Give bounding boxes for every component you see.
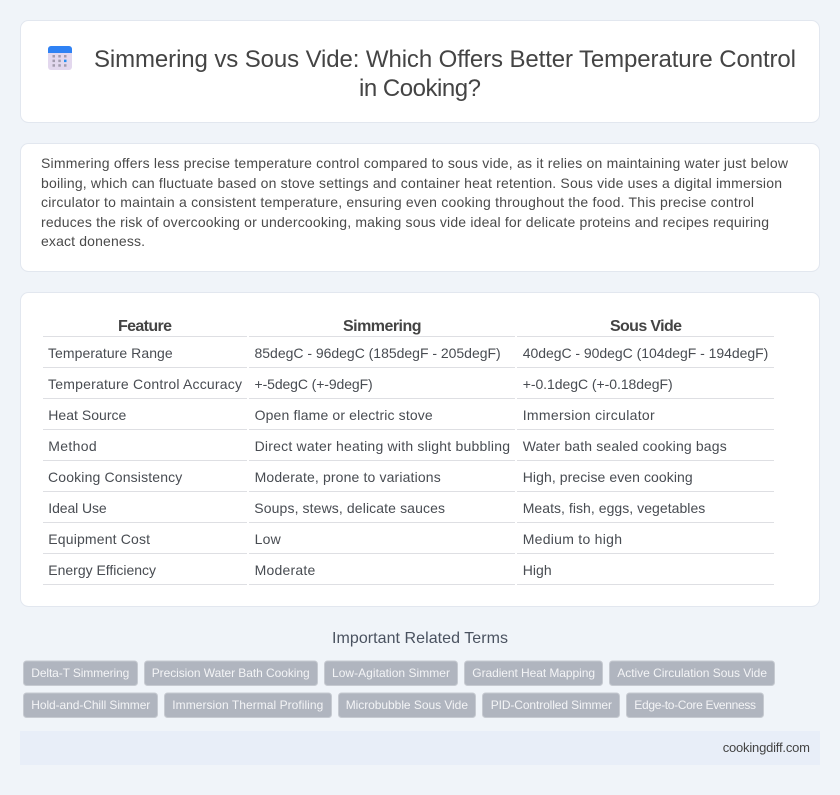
footer bar [20, 731, 820, 765]
row: energy efficiency [43, 562, 774, 585]
row: temperature control accuracy [43, 376, 774, 399]
tag: Low-Agitation Simmer: Low-Agitation Simmer [332, 666, 450, 680]
row: ideal use: Meats, fish, eggs, vegetables [523, 500, 705, 516]
summary paragraph: Simmering offers less precise temperature control compared to sous vide, as it relies on maintaining water just below [41, 155, 789, 171]
tag: Edge-to-Core Evenness: Edge-to-Core Evenness [634, 698, 756, 712]
row: ideal use: Ideal Use [48, 500, 107, 516]
tag: Hold-and-Chill Simmer: Hold-and-Chill Simmer [31, 698, 150, 712]
row: cooking consistency: Cooking Consistency [48, 469, 182, 485]
row: method [43, 438, 774, 461]
row: temperature range: 40degC - 90degC (104degF - 194degF) [523, 345, 768, 361]
panel: comparison table [20, 292, 820, 606]
tag: PID-Controlled Simmer [482, 693, 620, 718]
summary paragraph: boiling, which can fluctuate based on stove settings and container heat retention. Sous vide uses a digital immersion [41, 175, 782, 191]
row: temperature control accuracy: +-0.1degC (+-0.18degF) [523, 376, 673, 392]
tag: Hold-and-Chill Simmer [24, 693, 158, 718]
row: energy efficiency: Moderate [255, 562, 316, 578]
tag: PID-Controlled Simmer: PID-Controlled Simmer [491, 698, 612, 712]
tag: Immersion Thermal Profiling: Immersion Thermal Profiling [172, 698, 323, 712]
row: method: Method [48, 438, 97, 454]
tag: Delta-T Simmering: Delta-T Simmering [31, 666, 129, 680]
footer source text: cookingdiff.com [723, 740, 810, 755]
row: cooking consistency: Moderate, prone to variations [255, 469, 441, 485]
tag: Precision Water Bath Cooking: Precision Water Bath Cooking [152, 666, 310, 680]
summary paragraph: reduces the risk of overcooking or undercooking, making sous vide ideal for delicate proteins and recipes requiring [41, 214, 769, 230]
row: equipment cost [43, 531, 774, 554]
row: energy efficiency: Energy Efficiency [48, 562, 156, 578]
title: in Cooking? [359, 75, 481, 102]
row: ideal use [43, 500, 774, 523]
title [94, 46, 796, 102]
related terms tags [24, 661, 774, 718]
row: temperature range [43, 345, 774, 368]
tag: Delta-T Simmering [24, 661, 138, 686]
row: equipment cost: Medium to high [523, 531, 622, 547]
row: cooking consistency [43, 469, 774, 492]
summary paragraph: circulator to maintain a consistent temperature, ensuring even cooking throughout the food. This precise control [41, 194, 754, 210]
row: ideal use: Soups, stews, delicate sauces [254, 500, 445, 516]
summary paragraph: exact doneness. [41, 233, 145, 249]
panel: summary card [20, 144, 820, 272]
tag: Gradient Heat Mapping [464, 661, 602, 686]
row: temperature control accuracy: +-5degC (+-9degF) [254, 376, 373, 392]
tag: Microbubble Sous Vide: Microbubble Sous Vide [346, 698, 468, 712]
tag: Low-Agitation Simmer [324, 661, 458, 686]
tag: Active Circulation Sous Vide: Active Circulation Sous Vide [617, 666, 767, 680]
heading: important related terms: Important Related Terms [332, 630, 508, 647]
row: temperature control accuracy: Temperature Control Accuracy [48, 376, 242, 392]
row: heat source: Immersion circulator [523, 407, 655, 423]
row: heat source: Open flame or electric stove [255, 407, 433, 423]
tag: Edge-to-Core Evenness [626, 693, 764, 718]
panel: title card [20, 20, 820, 122]
tag: Microbubble Sous Vide [338, 693, 476, 718]
table header row [43, 318, 774, 337]
row: method: Direct water heating with slight bubbling [255, 438, 510, 454]
table header row: Feature [118, 318, 172, 335]
tag: Immersion Thermal Profiling [164, 693, 332, 718]
row: temperature range: 85degC - 96degC (185degF - 205degF) [254, 345, 501, 361]
tag: Gradient Heat Mapping: Gradient Heat Mapping [472, 666, 595, 680]
table header row: Simmering [343, 318, 422, 335]
table header row: Sous Vide [610, 318, 682, 335]
row: temperature range: Temperature Range [48, 345, 173, 361]
row: equipment cost: Low [255, 531, 282, 547]
row: method: Water bath sealed cooking bags [523, 438, 727, 454]
row: heat source: Heat Source [48, 407, 127, 423]
title: Simmering vs Sous Vide: Which Offers Better Temperature Control [94, 46, 796, 73]
row: cooking consistency: High, precise even cooking [523, 469, 693, 485]
tag: Active Circulation Sous Vide [610, 661, 774, 686]
icon: calendar [48, 46, 72, 70]
row: energy efficiency: High [523, 562, 552, 578]
row: equipment cost: Equipment Cost [48, 531, 150, 547]
tag: Precision Water Bath Cooking [144, 661, 318, 686]
summary paragraph [41, 155, 789, 249]
row: heat source [43, 407, 774, 430]
